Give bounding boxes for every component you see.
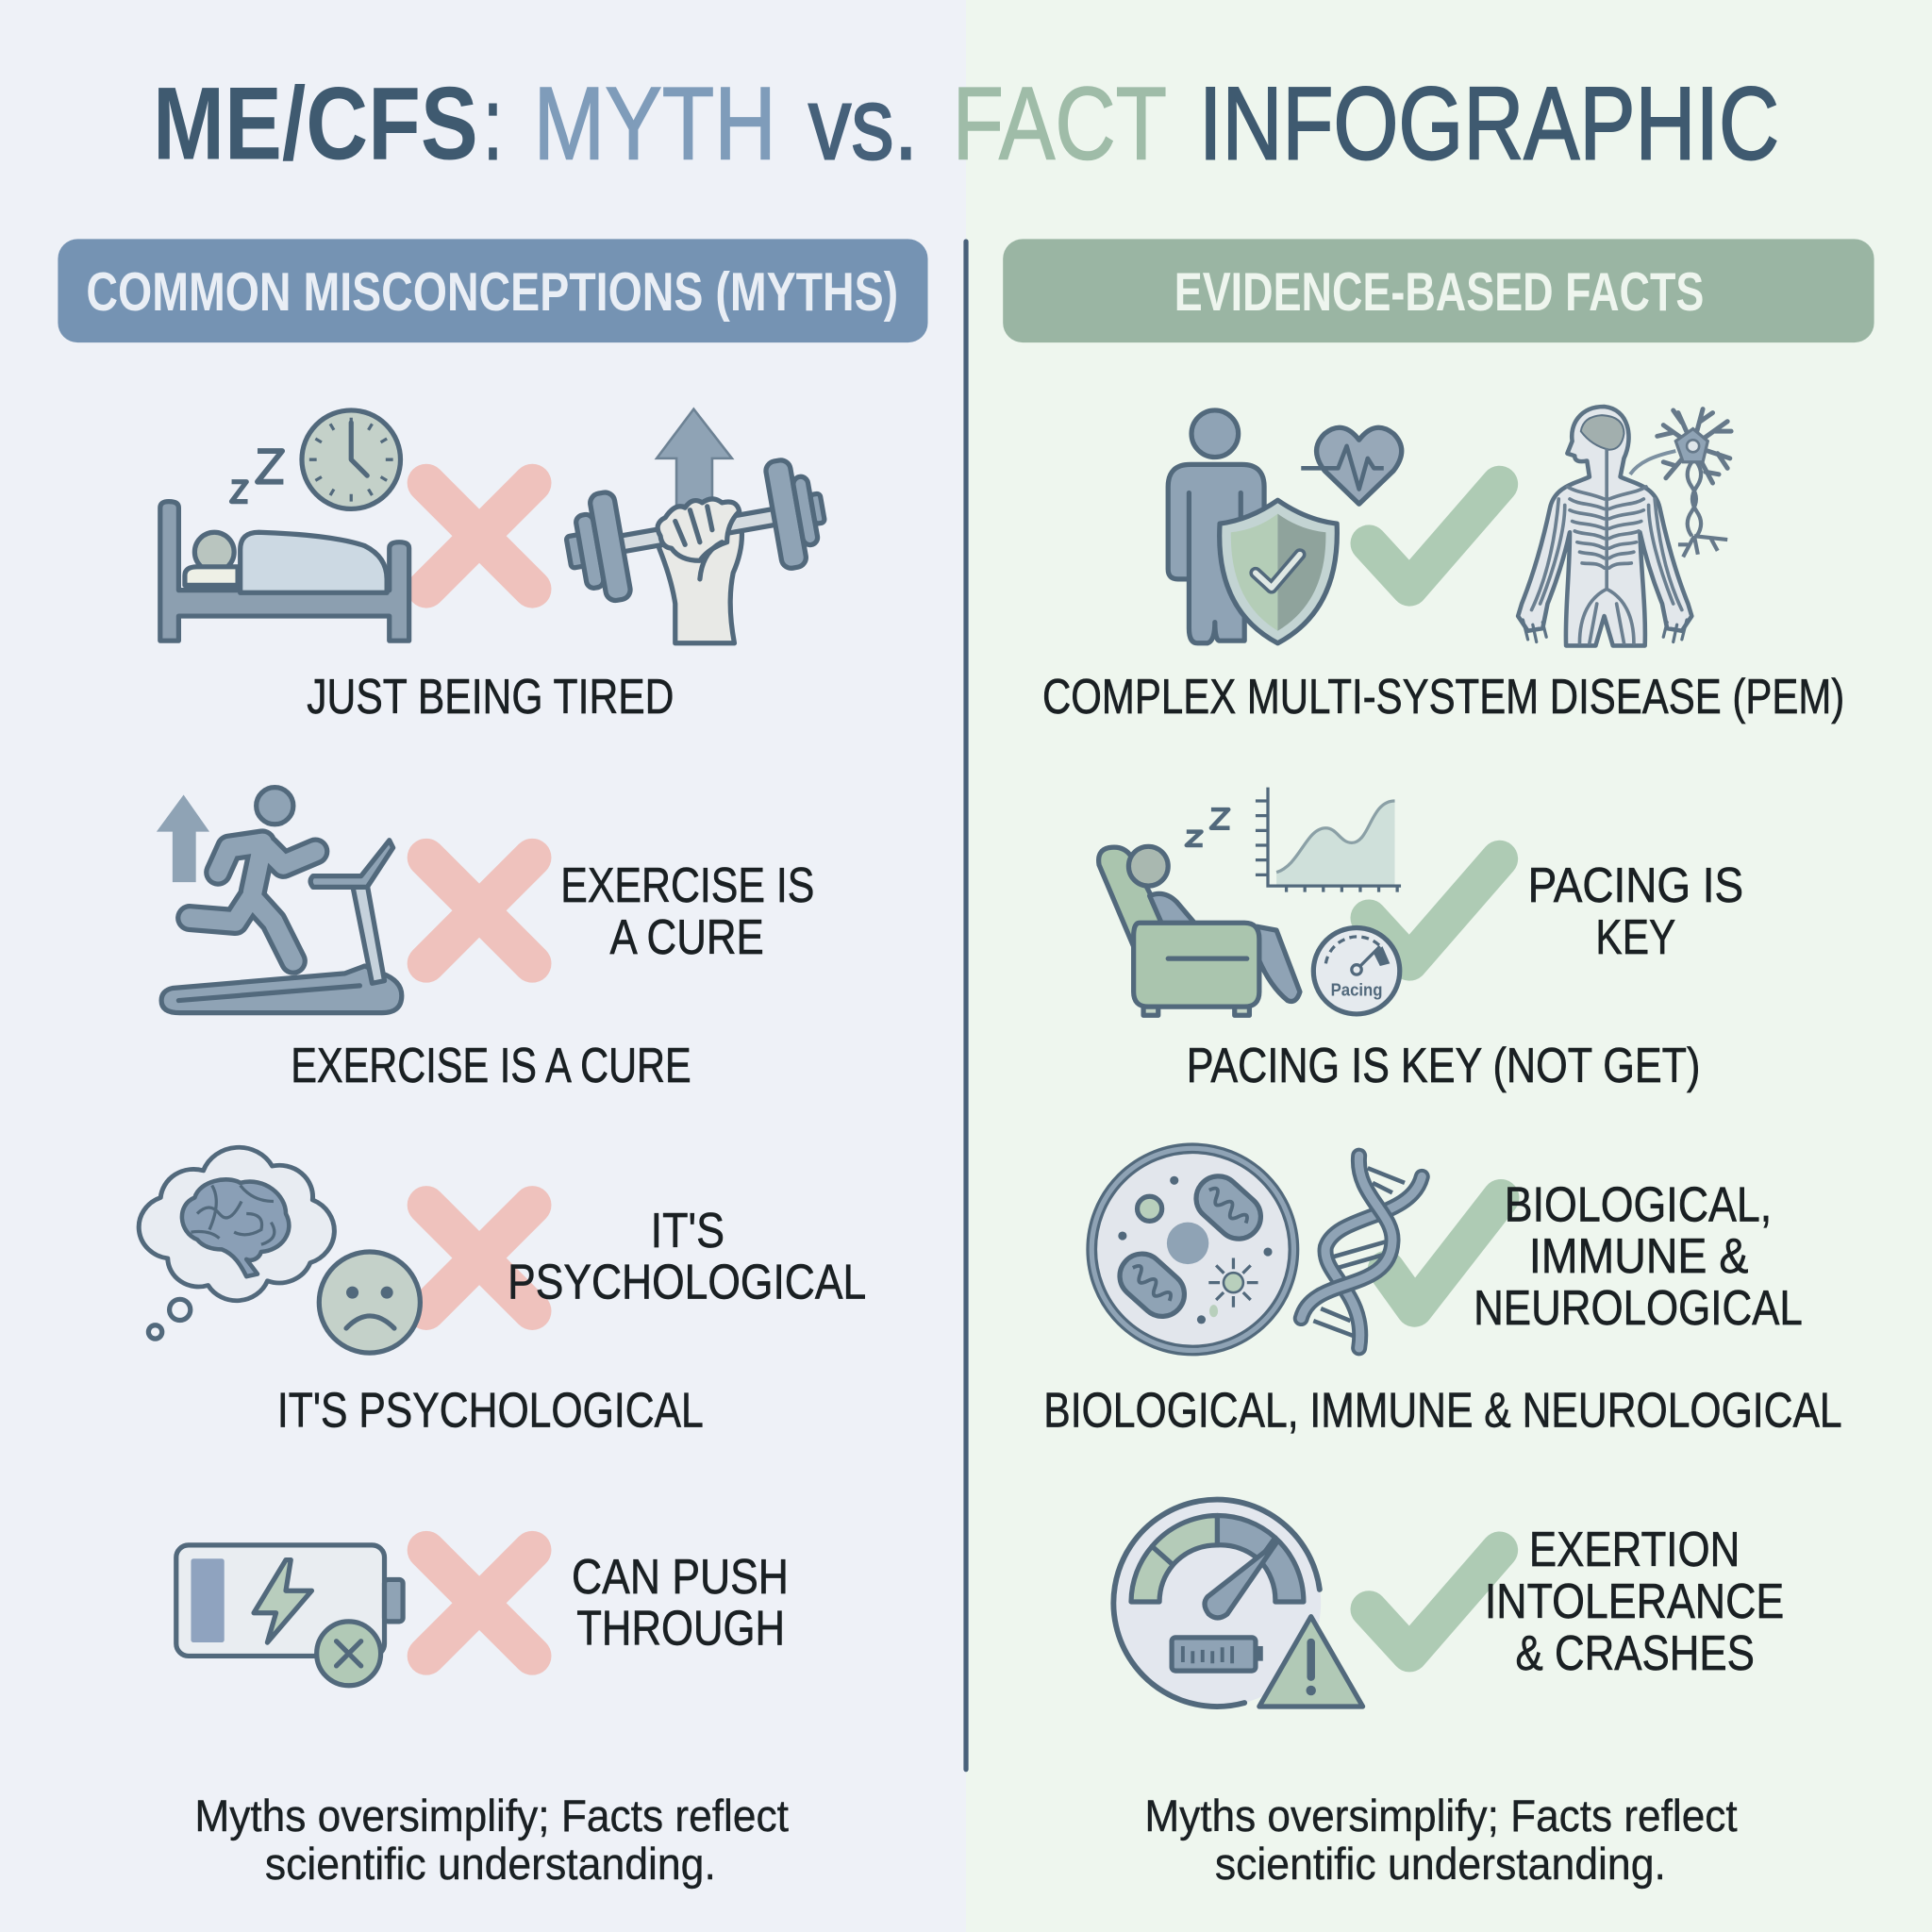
icon: pacing gauge: [1313, 928, 1400, 1014]
label: pacing is key (side): KEY: [1595, 910, 1675, 965]
red cross 1: [426, 483, 532, 589]
footer: right note: [1144, 1790, 1738, 1889]
heading: evidence-based facts: EVIDENCE-BASED FACTS: [1174, 262, 1704, 323]
title: MYTH: [534, 66, 776, 181]
panel: facts background: [966, 0, 1932, 1932]
label: exertion intolerance & crashes: [1485, 1523, 1784, 1681]
title: vs.: [808, 66, 918, 181]
icon: person resting in recliner: [1099, 809, 1300, 1015]
label: exertion intolerance & crashes: EXERTION: [1529, 1523, 1740, 1577]
title: :: [483, 66, 503, 181]
label: exercise is a cure (side): EXERCISE IS: [560, 858, 814, 913]
icon: dumbbell and fist with arrow: [559, 409, 832, 643]
label: can push through: THROUGH: [576, 1602, 785, 1657]
red cross 3: [426, 1205, 532, 1311]
label: exercise is a cure (side): [560, 858, 814, 965]
label: it's psychological (side): PSYCHOLOGICAL: [508, 1256, 866, 1310]
label: just being tired: JUST BEING TIRED: [307, 670, 674, 724]
panel: myths background: [0, 0, 966, 1932]
label: it's psychological: IT'S PSYCHOLOGICAL: [277, 1383, 704, 1438]
label: biological immune neurological (side): [1474, 1177, 1803, 1336]
label: exercise is a cure: EXERCISE IS A CURE: [291, 1039, 691, 1093]
title: FACT: [953, 66, 1167, 181]
green check 4: [1369, 1550, 1500, 1654]
green check 1: [1369, 484, 1500, 588]
green check 2: [1369, 858, 1500, 962]
footer: left note: Myths oversimplify; Facts reflect: [194, 1790, 789, 1840]
red cross 4: [426, 1550, 532, 1656]
heading: common misconceptions: [58, 239, 928, 342]
label: biological immune neurological (side): NEUROLOGICAL: [1474, 1281, 1803, 1336]
label: pacing is key (side): PACING IS: [1528, 858, 1743, 913]
footer: right note: scientific understanding.: [1215, 1839, 1666, 1889]
icon: exertion gauge with warning: [1113, 1500, 1363, 1707]
label: biological immune neurological (side): IMMUNE &: [1529, 1229, 1749, 1284]
label: pacing is key (not get): PACING IS KEY (NOT GET): [1187, 1039, 1700, 1093]
label: pacing is key (side): [1528, 858, 1743, 965]
label: exertion intolerance & crashes: INTOLERANCE: [1485, 1574, 1784, 1629]
green check 3: [1386, 1198, 1501, 1308]
heading: common misconceptions: COMMON MISCONCEPTIONS (MYTHS): [86, 262, 898, 323]
label: can push through: CAN PUSH: [572, 1550, 789, 1605]
label: exertion intolerance & crashes: & CRASHES: [1516, 1626, 1755, 1681]
icon: running person on treadmill with arrow: [157, 788, 402, 1013]
label: exercise is a cure (side): A CURE: [610, 910, 764, 965]
label: biological immune neurological (side): BIOLOGICAL,: [1505, 1177, 1772, 1232]
red cross 2: [426, 858, 532, 963]
title: ME/CFS: [153, 66, 478, 181]
label: can push through: [572, 1550, 789, 1657]
icon: depleted battery: [176, 1545, 403, 1686]
icon: person, heart and shield: [1168, 410, 1402, 643]
footer: left note: [194, 1790, 789, 1889]
icon: pacing gauge: Pacing: [1331, 979, 1382, 999]
heading: evidence-based facts: [1003, 239, 1874, 342]
icon: cell with mitochondria: [1091, 1148, 1293, 1351]
icon: bed with sleeper and clock: [160, 410, 409, 641]
chart: pacing area graph: [1256, 788, 1401, 892]
divider line: [963, 239, 969, 1772]
title: [153, 66, 1779, 181]
footer: right note: Myths oversimplify; Facts reflect: [1144, 1790, 1738, 1840]
label: it's psychological (side): IT'S: [651, 1204, 724, 1258]
icon: DNA helix: [1301, 1156, 1422, 1348]
footer: left note: scientific understanding.: [265, 1839, 716, 1889]
icon: thought cloud with brain and sad face: [139, 1147, 420, 1353]
title: INFOGRAPHIC: [1199, 66, 1779, 181]
label: it's psychological (side): [508, 1204, 866, 1310]
icon: human nervous system and neuron: [1518, 407, 1731, 645]
